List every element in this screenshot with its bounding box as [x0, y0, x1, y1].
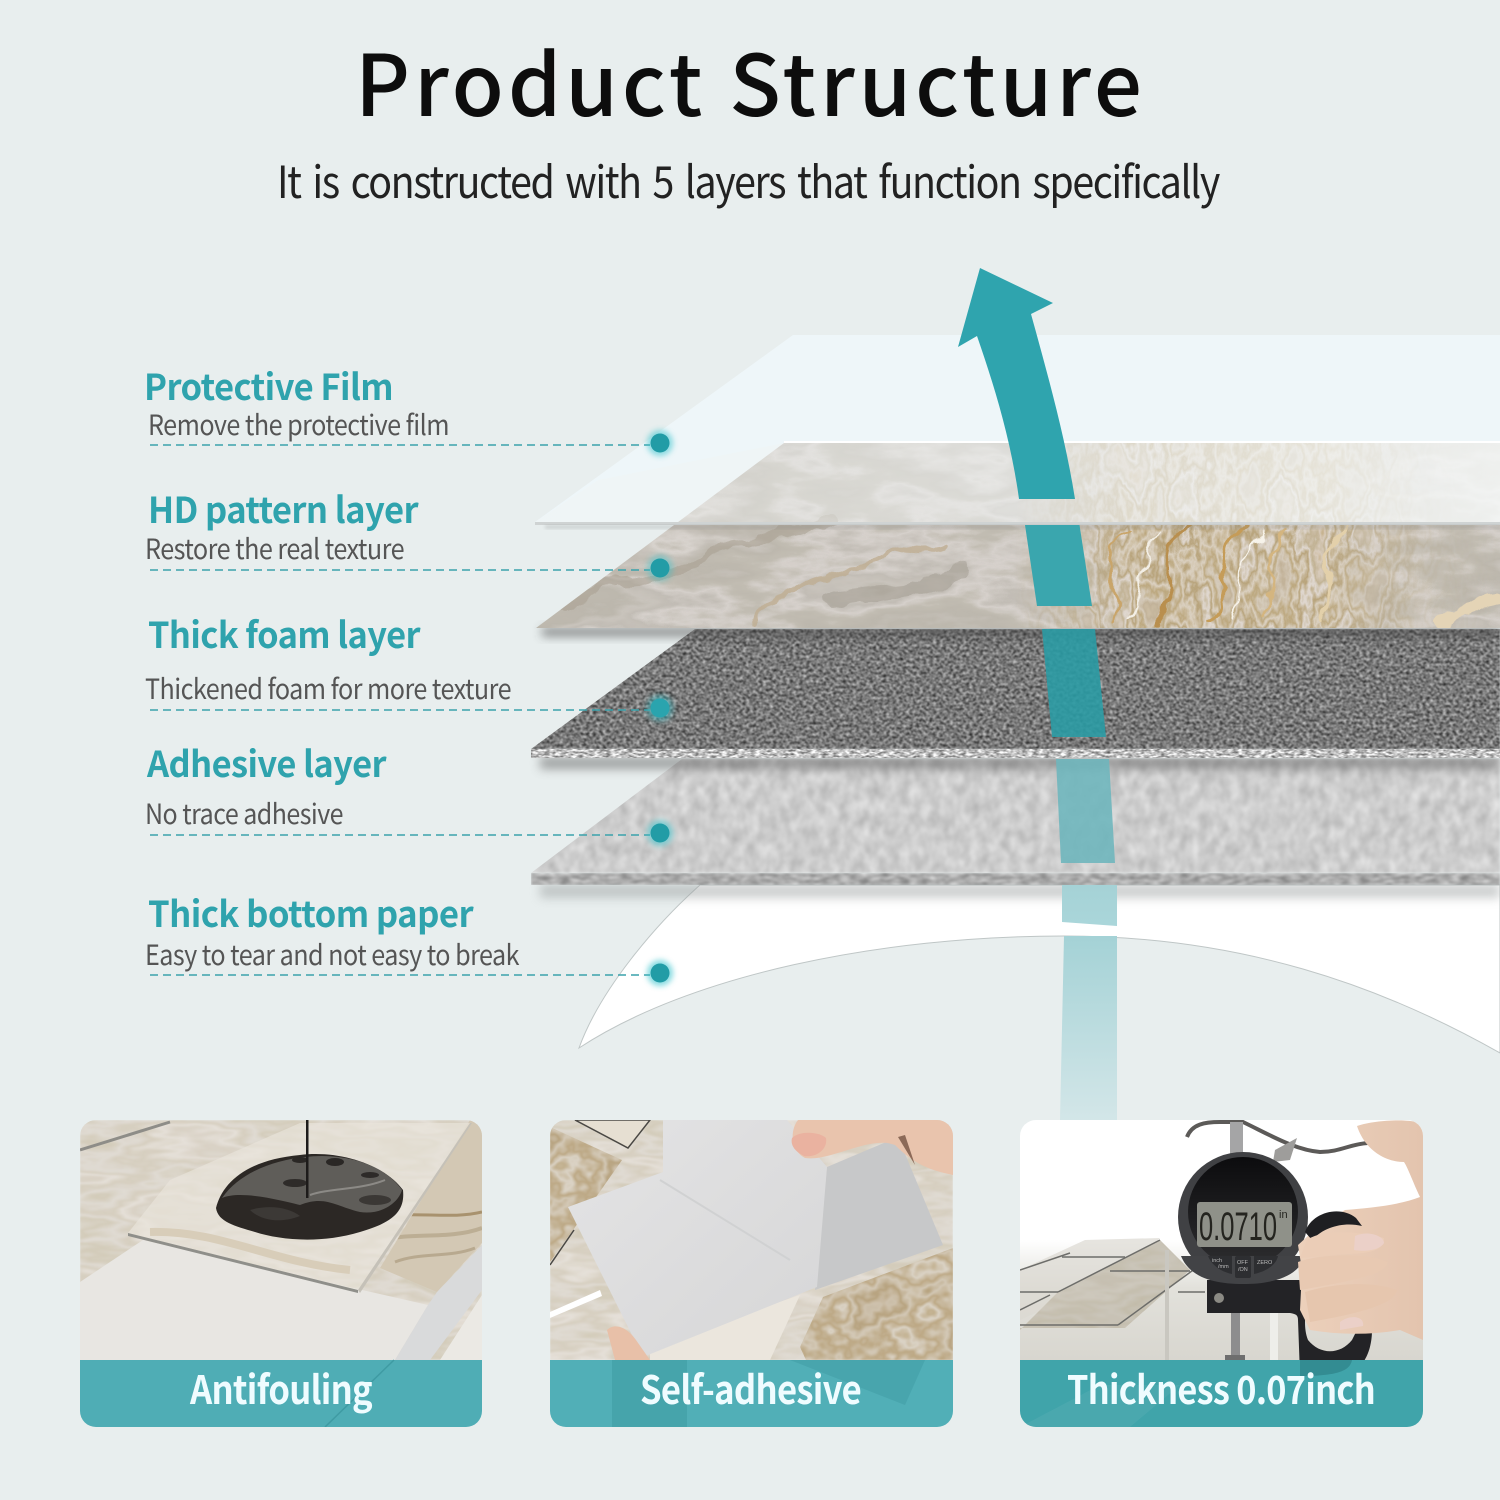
film overlay on marble [535, 443, 1500, 522]
protective film layer [535, 335, 1500, 522]
callout: HD pattern layer [145, 482, 673, 581]
top-left gold tile [550, 1128, 622, 1262]
icon: hand top [792, 1120, 953, 1175]
callout: Adhesive layer: Adhesive layer [146, 736, 387, 788]
icon: finger bottom [607, 1326, 650, 1360]
callout: Protective Film [144, 359, 673, 456]
layer diagram [530, 268, 1500, 1120]
tiles background [1020, 1238, 1160, 1285]
main tile [128, 1123, 470, 1290]
HD pattern marble layer [530, 440, 1500, 630]
icon: thickness gauge: inch [1212, 1258, 1222, 1264]
banner [550, 1360, 953, 1427]
callout: Thick bottom paper: Easy to tear and not easy to break [145, 934, 520, 974]
icon: thickness gauge: /ON [1238, 1267, 1248, 1273]
film front edge [535, 522, 1500, 525]
panel: Self-adhesive [550, 1120, 953, 1427]
bottom-right gold marble tile [800, 1248, 953, 1360]
top left tile edge [80, 1122, 170, 1150]
panel: Antifouling [80, 1120, 482, 1427]
label: Self-adhesive: Self-adhesive [640, 1360, 861, 1416]
icon: hand [1298, 1120, 1423, 1340]
icon: black stain blob [216, 1120, 403, 1240]
frame [1207, 1280, 1372, 1360]
icon: thickness gauge [1178, 1122, 1372, 1375]
icon: thickness gauge: 0.0710 [1199, 1205, 1277, 1249]
bottom paper layer [579, 885, 1500, 1053]
callout: Adhesive layer [145, 736, 673, 846]
callout: Thick foam layer: Thickened foam for more texture [145, 668, 511, 708]
subtitle: It is constructed with 5 layers that function specifically [277, 147, 1220, 211]
adhesive layer [530, 759, 1500, 885]
icon: thickness gauge: in [1279, 1209, 1288, 1221]
shadow under marble layer [542, 628, 1500, 636]
callout: Protective Film: Protective Film [144, 359, 393, 411]
label: Thickness 0.07inch: Thickness 0.07inch [1067, 1360, 1375, 1416]
marble veins [560, 520, 1500, 625]
callout: Adhesive layer: No trace adhesive [145, 793, 343, 833]
title: Product Structure [355, 18, 1142, 141]
callout: Thick foam layer [145, 607, 673, 721]
callout: HD pattern layer: HD pattern layer [148, 482, 419, 534]
right beige tile [380, 1120, 482, 1292]
banner [80, 1360, 482, 1427]
upward arrow [958, 268, 1117, 1120]
label: Antifouling: Antifouling [189, 1360, 372, 1416]
icon: thickness gauge: /mm [1218, 1264, 1229, 1270]
shadow under adhesive layer [540, 884, 1500, 898]
pale lower floor [80, 1240, 428, 1360]
callout: HD pattern layer: Restore the real texture [145, 528, 404, 568]
banner [1020, 1360, 1423, 1427]
callout: Protective Film: Remove the protective film [148, 404, 449, 444]
shadow under foam layer [540, 757, 1500, 769]
icon: thickness gauge: OFF [1237, 1260, 1249, 1266]
foam layer [530, 629, 1500, 758]
callout: Thick foam layer: Thick foam layer [148, 607, 421, 659]
panel: Thickness 0.07inch [1020, 1120, 1423, 1427]
callout: Thick bottom paper [145, 886, 673, 986]
callout: Thick bottom paper: Thick bottom paper [148, 886, 474, 938]
icon: thickness gauge: ZERO [1257, 1260, 1273, 1266]
icon: peeled sheet [568, 1120, 943, 1357]
